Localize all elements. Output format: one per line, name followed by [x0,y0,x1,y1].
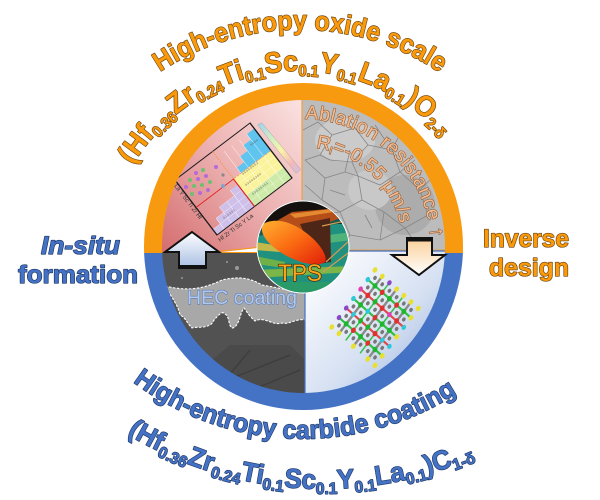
formula: carbide: Ti [243,461,265,484]
formula: oxide: Sc [264,52,298,74]
formula: carbide: 0.1 [262,478,284,492]
label: in-situ formation: formation [18,261,138,289]
axis labels: La Y Sc Ti Zr Hf [172,184,203,221]
formula: carbide: Y [336,468,354,489]
panel: inverse-designed lattice [305,251,450,400]
formula: oxide: 0.36 [152,111,178,138]
label: HEC coating: HEC coating [187,287,297,309]
panel: ablation micrograph [301,100,445,250]
callout: ablation resistance: Ablation resistance ↑ [304,105,443,235]
formula: oxide: )O [400,84,436,117]
formula: carbide: (Hf [128,419,168,451]
heat-map table: Hf Zr Ti Sc Y La [218,213,255,244]
formula: carbide: )C [420,450,452,480]
formula: carbide: La [374,465,406,486]
callout: recession rate: R [317,134,331,151]
formula: oxide: 0.1 [336,69,356,86]
heading: high-entropy carbide coating: High-entropy carbide coating [134,368,458,442]
heat-map table: 0.5 0.4 [249,138,259,147]
formula: oxide: 0.1 [384,87,405,107]
formula: oxide: 0.1 [244,68,267,83]
coating band with dashed outline [165,278,306,328]
heat-map table [172,123,292,244]
heat-map table: 0.4 0.4 0.4 0.2 [241,161,259,176]
formula: carbide: 0.1 [316,482,338,495]
formula: oxide: 2-δ [424,117,448,139]
label: inverse design [483,225,569,282]
callout: recession rate: l [328,146,333,155]
label: in-situ formation [18,232,138,289]
ring: blue lower half [144,253,463,410]
formula: carbide: 0.36 [158,446,188,468]
formula: oxide: Y [322,52,340,74]
arrow: down, inverse design [392,238,445,275]
formula: carbide: Sc [284,468,316,490]
crystal structure inset [184,165,225,196]
formula: carbide: Zr [186,446,216,472]
formula: carbide: 0.24 [210,466,241,485]
heat-map table: 0.3 0.2 0.3 0.1 [251,181,269,196]
heat-map table: 0.1 0.2 0.1 [222,208,236,220]
label: in-situ formation: In-situ [41,232,120,260]
colour bar [258,123,301,173]
formula: oxide: 0.1 [298,64,319,78]
formula: carbide: 0.1 [354,479,377,493]
heading: high-entropy oxide scale: High-entropy oxide scale [150,14,446,72]
label: TPS: TPS [278,260,322,287]
formula: oxide: Ti [216,58,244,84]
label: inverse design: design [489,254,569,282]
formula: oxide: (Hf [117,120,154,164]
ring: orange upper half [144,83,463,253]
label: inverse design: Inverse [483,225,569,253]
panel: HEC coating micrograph [155,253,306,400]
formula: carbide: 0.1 [406,468,428,485]
arrow: up, in-situ formation [165,232,219,268]
panel: phase diagram [155,95,302,253]
crystal lattice [332,270,418,365]
formula: oxide: 0.24 [196,80,225,103]
icon: TPS vehicle re-entry image [256,200,350,294]
formula: oxide: La [358,61,390,92]
formula: oxide: Zr [164,86,194,115]
callout: recession rate: =-0.55 μm/s [334,142,411,223]
cell values: 0.3 0.4 0.3 0.4 [244,172,262,187]
formula: carbide: 1-δ [452,451,476,471]
